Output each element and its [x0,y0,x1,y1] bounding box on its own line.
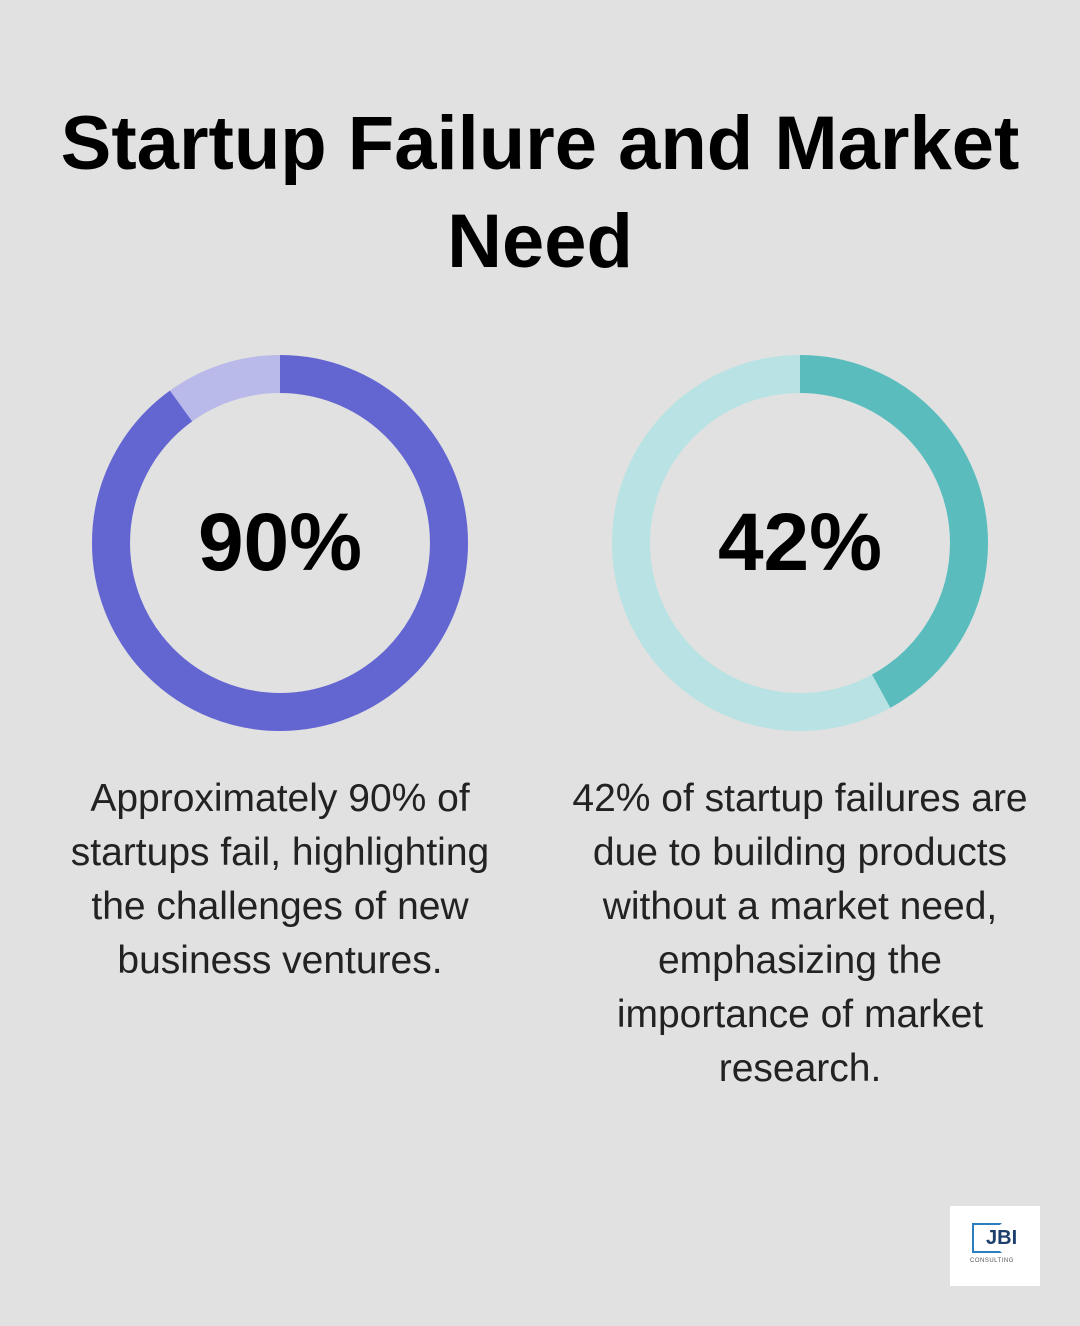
donut chart: 42% [612,355,988,731]
text: 90% description: the challenges of new [91,885,469,928]
text: 42% description: 42% of startup failures are [572,777,1028,820]
text: 42% description: without a market need, [603,885,997,928]
title: Need [447,199,633,284]
title [61,101,1019,284]
text: 42% description: research. [719,1047,881,1090]
text: 90% description: Approximately 90% of [90,777,470,820]
donut chart: 90% [92,355,468,731]
logo: JBI Consulting [950,1206,1040,1286]
text: 90% description: startups fail, highlighting [71,831,489,874]
text: 42% description: emphasizing the [658,939,942,982]
logo: JBI Consulting: CONSULTING [970,1258,1014,1264]
text: 90% description: business ventures. [117,939,443,982]
title: Startup Failure and Market [61,101,1019,186]
logo: JBI Consulting: JBI [986,1227,1017,1249]
text: 90% description [71,777,489,982]
text: 42% description: due to building products [593,831,1007,874]
value: 90%: 90% [198,497,362,588]
value: 42%: 42% [718,497,882,588]
text: 42% description [572,777,1028,1090]
text: 42% description: importance of market [617,993,983,1036]
